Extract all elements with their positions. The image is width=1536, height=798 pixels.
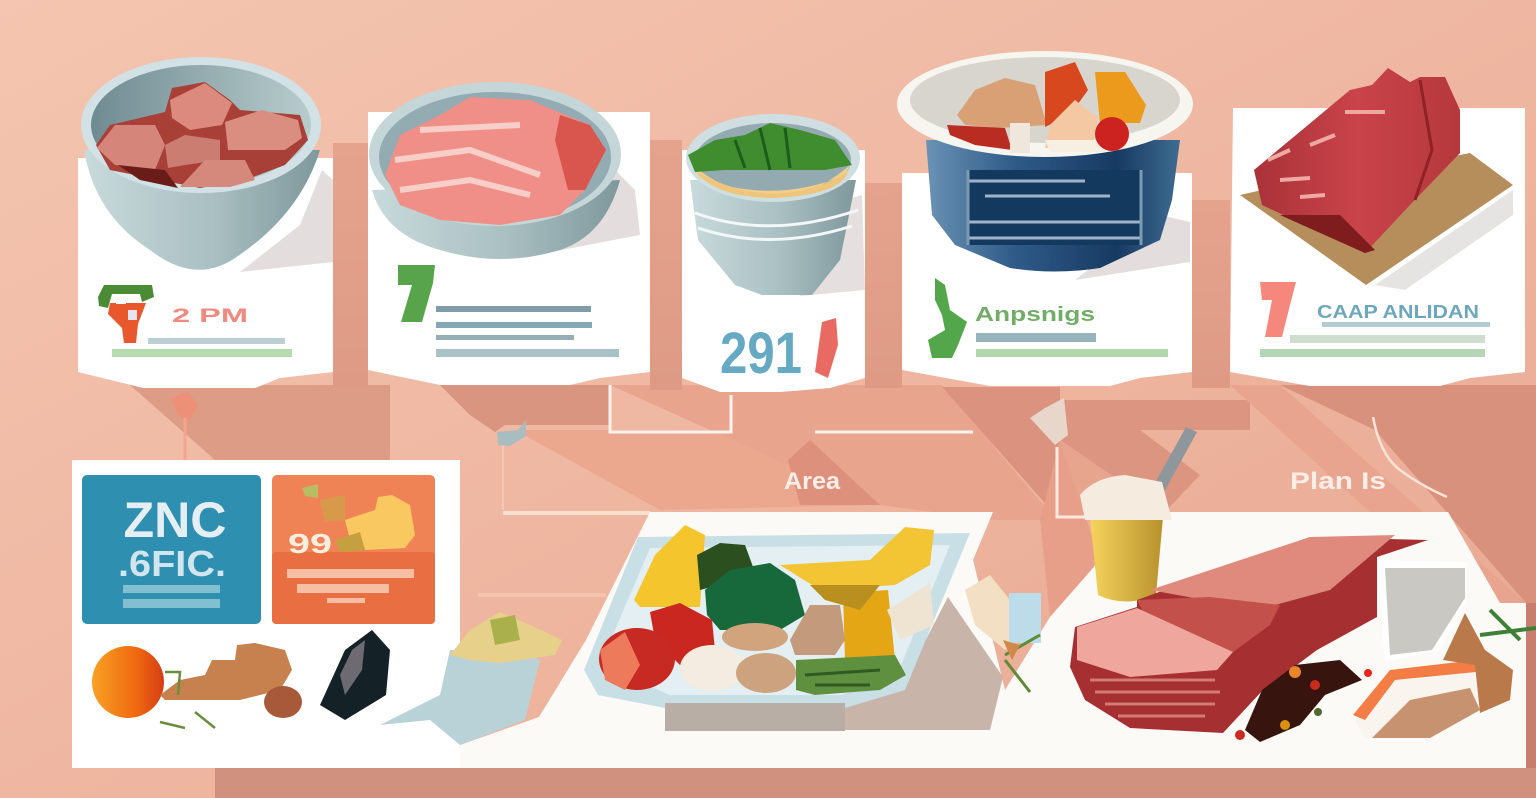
numeral 7 (1260, 282, 1296, 337)
icon: green seahorse (928, 278, 967, 358)
peppercorns (1235, 660, 1372, 742)
card 5 text (1260, 322, 1490, 357)
salmon and onion (1353, 610, 1536, 738)
juice glass with spoon (1080, 427, 1197, 602)
card 3 numerals: 291 (720, 321, 802, 386)
flowers illustration (345, 495, 415, 550)
card 1 text (112, 338, 292, 357)
white cup (1377, 560, 1467, 662)
zinc title: ZNC (124, 492, 226, 548)
orange card text (287, 569, 414, 603)
shadow of bowl 1 (240, 170, 333, 272)
nuts and mushrooms (160, 643, 302, 728)
white table surface (72, 512, 1526, 768)
card 5 heading: CAAP ANLIDAN (1317, 302, 1479, 322)
tomatoes (694, 631, 696, 633)
card 4 (897, 51, 1193, 386)
garlic and herb (965, 575, 1041, 692)
plate shadow (665, 597, 1003, 730)
cutting board (1240, 153, 1513, 285)
orange card number: 99 (288, 528, 332, 559)
orange card (272, 475, 435, 624)
zinc small text (123, 585, 220, 608)
connector icons (170, 392, 1068, 480)
black olive (320, 630, 390, 720)
green beans (796, 655, 906, 695)
broccoli (697, 543, 756, 590)
center label: Area (784, 468, 841, 495)
large roast meat (1070, 535, 1428, 733)
card 4 heading: Anpsnigs (975, 304, 1095, 326)
orange fruit (92, 646, 164, 718)
steak (1254, 68, 1460, 253)
card 1 heading: 2 PM (172, 306, 248, 327)
numeral 7 (398, 265, 435, 322)
bowl 2 (369, 82, 621, 259)
bananas (634, 525, 705, 607)
card 4 text (976, 333, 1168, 357)
connector lines (185, 385, 1447, 595)
mushrooms (722, 623, 788, 651)
bowl 1 (81, 57, 321, 270)
card 2 text (436, 306, 619, 357)
right label: Plan Is (1290, 468, 1386, 495)
zinc subtitle: .6FIC. (118, 543, 226, 584)
card 3 (682, 114, 865, 392)
pot (897, 51, 1193, 272)
icon: tomato sprig (98, 285, 154, 343)
bowl 3 (686, 114, 860, 295)
left panel (72, 427, 1536, 768)
card 2 (368, 82, 650, 385)
icon: red pepper (815, 318, 838, 378)
card 1 (78, 57, 333, 388)
card 5 (1230, 68, 1525, 386)
center plate with vegetables (584, 525, 970, 731)
small glass dish (380, 612, 562, 745)
ZINC blue card (82, 475, 261, 624)
